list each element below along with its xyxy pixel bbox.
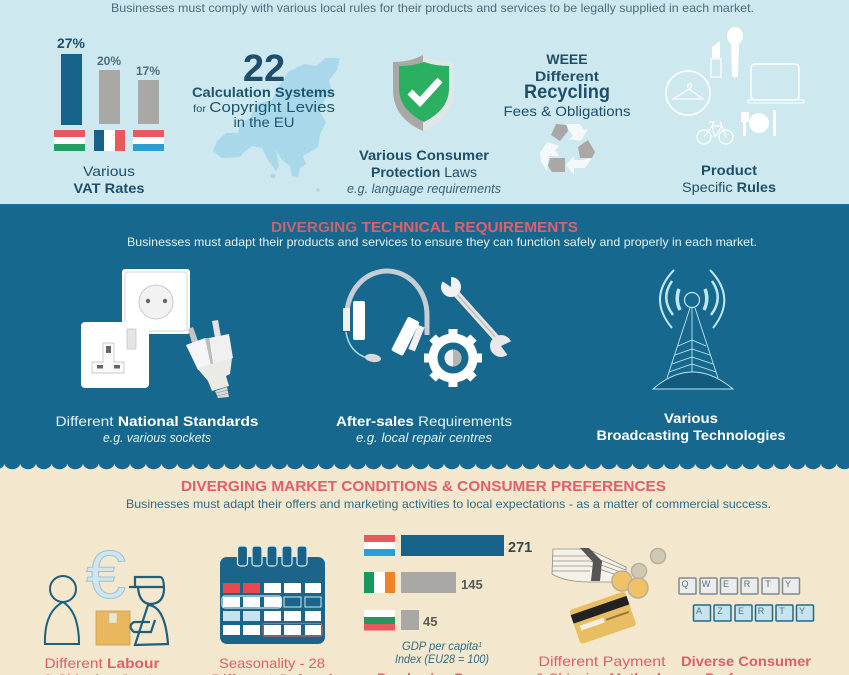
text: broadcasting: Broadcasting Technologies — [596, 427, 786, 443]
icon: keyboard keys: W — [702, 579, 711, 589]
icon: banknotes — [552, 548, 626, 582]
text: consumer protection: Protection Laws — [371, 164, 477, 180]
text: seasonality: Seasonality - 28 — [219, 655, 325, 671]
icon: broadcast tower — [653, 270, 733, 389]
text: national standards: e.g. various sockets — [103, 431, 211, 445]
text: payment methods: Different Payment — [538, 653, 666, 669]
subtitle: technical: Businesses must adapt their products and services to ensure they can function safely and properly in each market. — [127, 235, 757, 249]
text: after-sales — [336, 413, 512, 445]
chart: GDP per capita: 145 — [461, 577, 483, 592]
text: copyright levies: Calculation Systems — [192, 84, 335, 100]
icon: calendar — [220, 546, 325, 644]
text: national standards — [56, 413, 259, 445]
icon: gear — [424, 329, 482, 387]
text: recycling — [504, 51, 630, 119]
chart: GDP per capita: 1 — [478, 642, 482, 649]
chart: VAT rates: VAT Rates — [74, 180, 145, 196]
icon: shield — [393, 55, 454, 131]
text: product rules: Specific Rules — [682, 179, 776, 195]
panel: technical requirements — [56, 219, 786, 445]
heading: technical: DIVERGING TECHNICAL REQUIREMENTS — [271, 219, 578, 236]
icon: wrench — [436, 272, 516, 360]
text: consumer preferences: Diverse Consumer — [681, 653, 812, 669]
text: product rules — [682, 162, 776, 195]
icon: keyboard keys: R — [744, 579, 751, 589]
text: copyright levies: for Copyright Levies — [193, 99, 335, 116]
icon: keyboard keys: Y — [785, 579, 791, 589]
text: consumer protection — [347, 147, 501, 196]
icon: headset — [343, 271, 427, 363]
panel: market conditions — [43, 478, 814, 675]
icon: keyboard keys: E — [738, 606, 744, 616]
chart: GDP per capita: Index (EU28 = 100) — [395, 654, 489, 666]
subtitle: market: Businesses must adapt their offers and marketing activities to local expectations - as a matter of commercial success. — [126, 497, 771, 511]
icon: keyboard keys: E — [723, 579, 729, 589]
text: copyright levies — [192, 48, 335, 130]
text: consumer protection: Various Consumer — [359, 147, 490, 163]
text: labour costs: Different Labour — [44, 655, 160, 671]
icon: keyboard keys: T — [765, 579, 771, 589]
icon: coins — [612, 548, 666, 598]
subtitle: legal: Businesses must comply with various local rules for their products and services to be legally supplied in each market. — [111, 1, 754, 15]
chart: VAT rates: 27% — [57, 35, 86, 51]
text: broadcasting — [596, 410, 786, 443]
chart: GDP per capita: GDP per capita — [402, 641, 480, 653]
chart: VAT rates: Various — [83, 163, 135, 179]
icon: keyboard keys: T — [779, 606, 785, 616]
chart: VAT rates — [54, 35, 164, 196]
heading: market: DIVERGING MARKET CONDITIONS & CONSUMER PREFERENCES — [181, 478, 666, 495]
icon: sockets and plug — [81, 269, 233, 398]
text: recycling: Fees & Obligations — [504, 103, 630, 119]
chart: GDP per capita: 45 — [423, 614, 437, 629]
text: product rules: Product — [701, 162, 757, 178]
text: after-sales: e.g. local repair centres — [356, 431, 492, 445]
text: recycling: Different — [535, 68, 599, 84]
text: consumer protection: e.g. language requirements — [347, 181, 501, 196]
chart: VAT rates: 17% — [136, 64, 160, 78]
chart: GDP per capita — [364, 535, 532, 666]
text: recycling: WEEE — [546, 51, 588, 67]
text: recycling: Recycling — [524, 82, 610, 103]
icon: EU map — [213, 58, 340, 192]
icon: keyboard keys: Q — [681, 579, 689, 589]
icon: product categories — [666, 27, 804, 144]
text: national standards: Different National Standards — [56, 413, 259, 429]
text: after-sales: After-sales Requirements — [336, 413, 512, 429]
icon: labour and shipping: € — [86, 537, 126, 613]
text: payment methods — [535, 653, 669, 675]
icon: labour and shipping — [45, 537, 168, 645]
icon: credit card — [569, 591, 637, 644]
icon: keyboard keys: Z — [717, 606, 723, 616]
icon: recycle — [540, 124, 595, 175]
chart: GDP per capita: 271 — [508, 540, 532, 556]
text: copyright levies: in the EU — [234, 114, 294, 130]
icon: keyboard keys: Y — [799, 606, 805, 616]
text: consumer preferences — [681, 653, 812, 675]
text: copyright levies: 22 — [243, 48, 285, 90]
text: seasonality — [211, 655, 333, 675]
icon: keyboard keys: R — [758, 606, 765, 616]
chart: VAT rates: 20% — [97, 54, 121, 68]
text: broadcasting: Various — [664, 410, 718, 426]
panel: legal requirements — [54, 1, 804, 196]
icon: keyboard keys — [679, 578, 814, 621]
icon: keyboard keys: A — [696, 606, 702, 616]
